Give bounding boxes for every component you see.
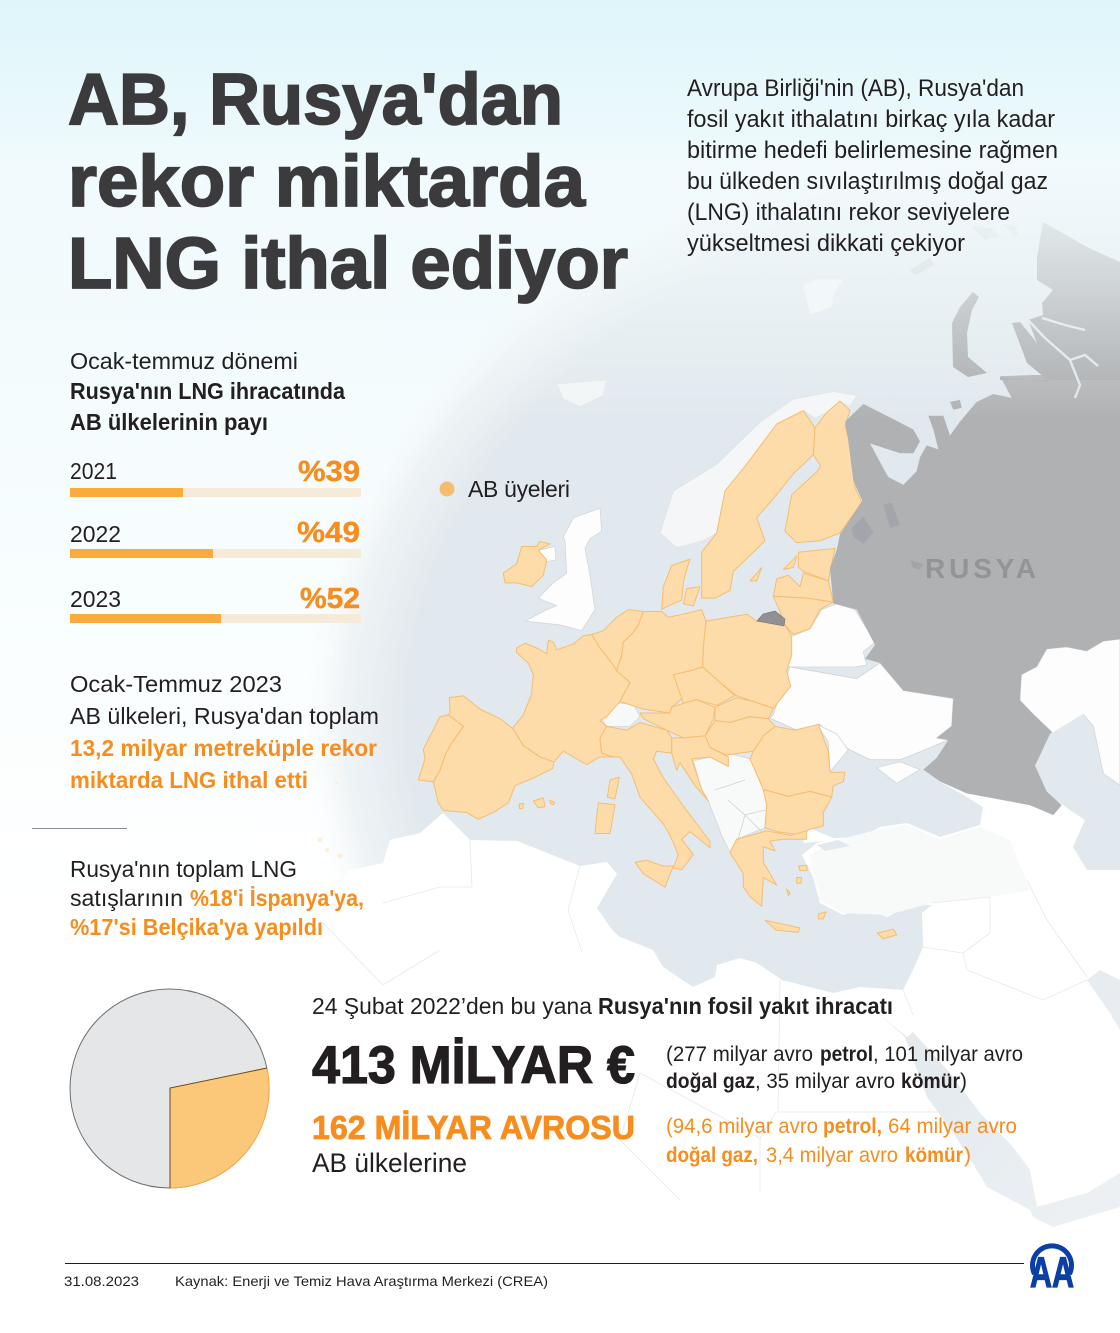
text block: record import: 13,2 milyar metreküple rekor (70, 735, 377, 761)
title: LNG ithal ediyor (68, 224, 628, 304)
breakdown: total: ) (960, 1070, 967, 1093)
breakdown: total: , 35 milyar avro (755, 1070, 895, 1093)
bar 2023: 2023 (70, 586, 121, 612)
text block: record import: AB ülkeleri, Rusya'dan toplam (70, 703, 379, 729)
breakdown: EU: 3,4 milyar avro (766, 1144, 898, 1167)
text block: record import: miktarda LNG ithal etti (70, 767, 308, 793)
map: non-EU European countries (525, 380, 875, 853)
map: EU member states (418, 401, 897, 939)
text block: Spain and Belgium share: Rusya'nın toplam LNG (70, 856, 297, 882)
text block: Spain and Belgium share: %17'si Belçika'ya yapıldı (70, 914, 323, 940)
breakdown: EU: 64 milyar avro (888, 1115, 1017, 1138)
pie chart (70, 989, 269, 1188)
breakdown: total: petrol (820, 1043, 873, 1066)
pie slice: EU share (170, 1068, 269, 1188)
bar 2023 (70, 583, 361, 623)
map: Balkan borders (715, 780, 765, 850)
map: Turkey relief wash (810, 825, 1030, 915)
map: Atlantic islands (318, 781, 342, 858)
bar chart: LNG share (70, 456, 361, 623)
map: European Turkey and Marmara (803, 827, 850, 851)
label: Russia: RUSYA (925, 553, 1036, 584)
fossil fuel heading: Rusya'nın fosil yakıt ihracatı (598, 993, 893, 1019)
breakdown: EU: ) (964, 1144, 971, 1167)
breakdown: EU: doğal gaz, (666, 1144, 758, 1167)
intro text: bu ülkeden sıvılaştırılmış doğal gaz (687, 168, 1048, 195)
intro text: bitirme hedefi belirlemesine rağmen (687, 137, 1058, 164)
bar 2023: %52 (300, 583, 360, 615)
title: rekor miktarda (68, 142, 586, 222)
intro text: (LNG) ithalatını rekor seviyelere (687, 199, 1010, 226)
text block: Spain and Belgium share: satışlarının (70, 885, 183, 911)
map: faint borders (320, 840, 1087, 1200)
footer: date: 31.08.2023 (64, 1273, 139, 1289)
breakdown: EU: kömür (905, 1144, 963, 1167)
map: Ukraine, Kazakhstan and northern islands (770, 279, 1120, 785)
map: North Africa and Middle East land (300, 780, 1120, 1333)
bar chart heading: Rusya'nın LNG ihracatında (70, 378, 345, 404)
breakdown: EU (666, 1115, 1017, 1167)
text block: Spain and Belgium share: %18'i İspanya'ya, (190, 885, 364, 911)
breakdown: EU: petrol, (823, 1115, 882, 1138)
map: Novaya Zemlya (952, 292, 987, 377)
breakdown: total: , 101 milyar avro (873, 1043, 1023, 1066)
legend: EU members: AB üyeleri (468, 476, 570, 502)
intro text: yükseltmesi dikkati çekiyor (687, 230, 965, 257)
breakdown: total: doğal gaz (666, 1070, 755, 1093)
map: Red Sea and gulfs (880, 970, 1120, 1227)
intro text: fosil yakıt ithalatını birkaç yıla kadar (687, 106, 1055, 133)
bar 2021 (70, 456, 361, 497)
map: sea globe (290, 160, 1120, 1333)
map: Caspian Sea (1035, 714, 1120, 870)
text block: record import (70, 671, 379, 793)
fossil fuel heading (312, 993, 893, 1019)
intro text (687, 75, 1058, 257)
bar chart heading: AB ülkelerinin payı (70, 409, 268, 435)
map: Arctic Russia (1000, 222, 1120, 398)
icon: AA logo: AA (1030, 1249, 1074, 1297)
breakdown: total: kömür (901, 1070, 960, 1093)
footer: source: Kaynak: Enerji ve Temiz Hava Araştırma Merkezi (CREA) (175, 1273, 548, 1289)
breakdown: EU: (94,6 milyar avro (666, 1115, 818, 1138)
bar 2022: %49 (297, 517, 360, 549)
bar 2022: 2022 (70, 521, 121, 547)
map: Russian lakes (852, 503, 923, 570)
breakdown: total: (277 milyar avro (666, 1043, 813, 1066)
title (68, 60, 628, 304)
map: Russia (830, 375, 1120, 815)
map: Arctic gulfs (1028, 318, 1098, 398)
title: AB, Rusya'dan (68, 60, 563, 140)
bar 2021: %39 (298, 456, 360, 488)
map: Arctic islands (910, 224, 1018, 275)
intro text: Avrupa Birliği'nin (AB), Rusya'dan (687, 75, 1024, 102)
big number: EU share: 162 MİLYAR AVROSU (312, 1109, 635, 1146)
bar chart heading (70, 348, 345, 435)
breakdown: total (666, 1043, 1023, 1093)
bar 2021: 2021 (70, 458, 117, 484)
text block: Spain and Belgium share (70, 856, 364, 940)
icon: AA logo (1030, 1246, 1074, 1297)
bar chart heading: Ocak-temmuz dönemi (70, 348, 298, 374)
bar 2022 (70, 517, 361, 558)
text block: record import: Ocak-Temmuz 2023 (70, 671, 282, 697)
label: to EU countries: AB ülkelerine (312, 1148, 467, 1178)
fossil fuel heading: 24 Şubat 2022’den bu yana (312, 993, 592, 1019)
map: Kaliningrad (757, 611, 785, 626)
map: northern fade (0, 160, 1120, 420)
big number: total exports: 413 MİLYAR € (312, 1036, 635, 1095)
